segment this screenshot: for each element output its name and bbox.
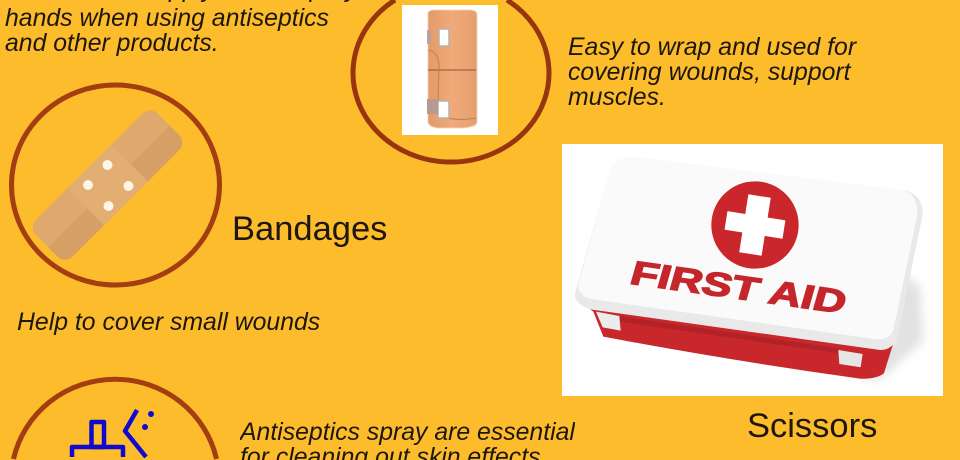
heading: bandages: Bandages	[232, 210, 387, 248]
text block: crepe bandage description: muscles.	[568, 84, 666, 111]
image: first aid kit	[562, 144, 943, 396]
text block: crepe bandage description: Easy to wrap and used for	[568, 34, 856, 61]
image: first aid kit: FIRST AID	[626, 255, 851, 321]
icon: circled adhesive bandage	[12, 85, 220, 285]
text block: crepe bandage description: covering wounds, support	[568, 59, 851, 86]
text block: hand sanitizer description: and other products.	[5, 30, 219, 57]
text block: crepe bandage description	[568, 34, 857, 111]
text block: antiseptic spray description	[240, 420, 575, 460]
heading: scissors: Scissors	[747, 407, 877, 445]
text block: hand sanitizer description: hands when using antiseptics	[5, 5, 329, 32]
text block: bandages description: Help to cover small wounds	[17, 309, 320, 336]
icon: circled antiseptic spray	[14, 379, 216, 459]
text block: hand sanitizer description	[5, 0, 358, 57]
icon: circled crepe bandage roll	[353, 0, 549, 162]
